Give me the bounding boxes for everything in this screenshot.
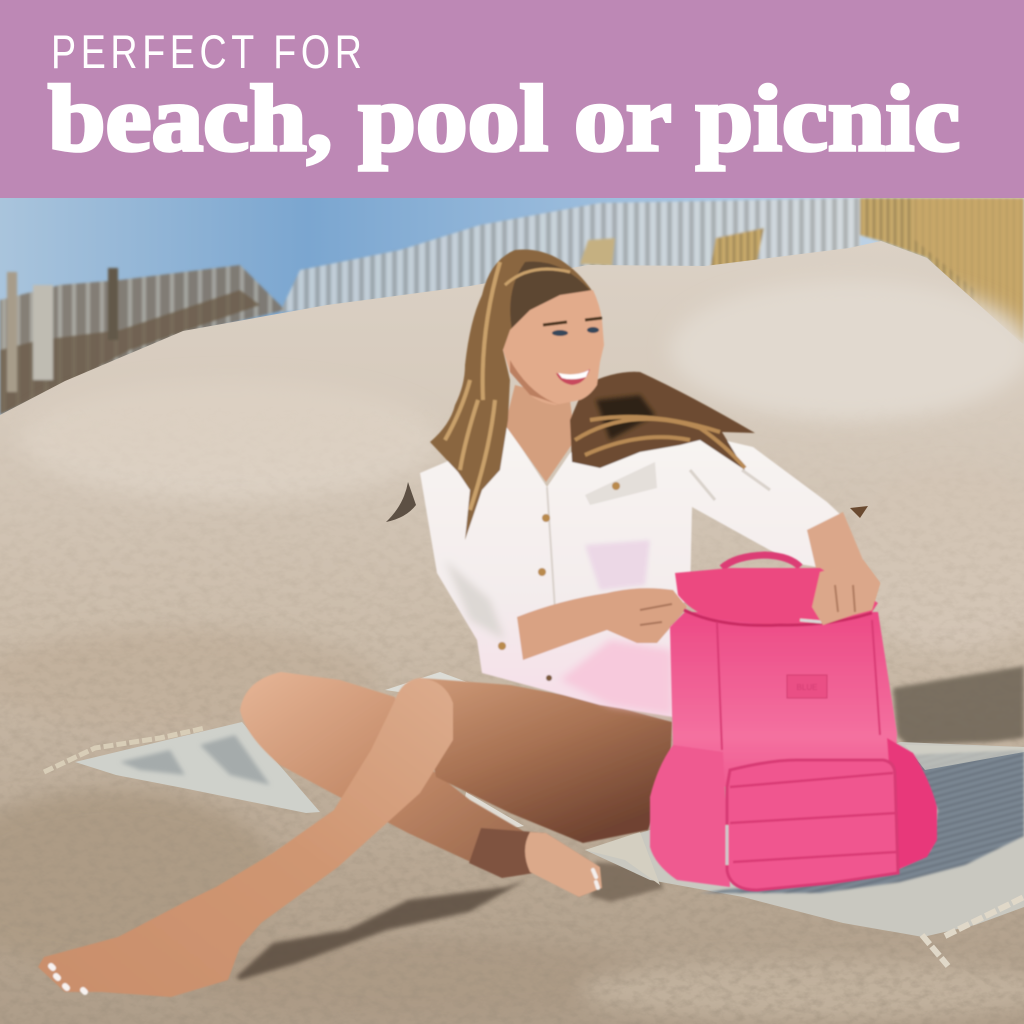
sand shading	[0, 280, 1024, 1020]
handle	[722, 555, 800, 568]
face	[503, 290, 604, 405]
beach blanket	[44, 672, 1024, 966]
sand grain texture	[0, 573, 1024, 1024]
shirt	[420, 420, 843, 717]
shirt details	[445, 462, 770, 715]
hair	[430, 250, 593, 540]
lid	[675, 568, 878, 624]
seaweed on sand	[386, 482, 416, 522]
pink backpack	[650, 555, 937, 890]
far leg	[240, 672, 530, 870]
left corner of blanket	[75, 722, 320, 813]
smile	[556, 369, 590, 385]
near shin and foot	[38, 678, 453, 997]
near forearm and hand	[517, 588, 687, 660]
sand	[0, 241, 1024, 1024]
logo patch: BLUE	[797, 683, 817, 692]
headline text: beach, pool or picnic	[48, 67, 960, 171]
back fence and dune grass	[0, 198, 1024, 415]
sky	[0, 198, 1024, 418]
blanket between the legs	[462, 792, 524, 832]
left side pocket	[650, 745, 730, 887]
shadows on sand	[236, 666, 1024, 980]
near thigh	[420, 678, 672, 843]
front puffer pocket	[727, 760, 898, 890]
neck and chest	[505, 385, 575, 482]
back of hair, wind blown	[570, 372, 755, 470]
toenails	[51, 966, 85, 992]
eyebrow text: PERFECT FOR	[51, 26, 367, 79]
main body	[670, 612, 897, 790]
eyes and eyebrows	[543, 318, 602, 325]
logo patch	[787, 675, 827, 698]
zipper pulls	[726, 825, 728, 865]
fringe	[922, 897, 1024, 966]
right side lit blanket	[585, 742, 1024, 937]
shaded blue weave area	[700, 750, 1024, 893]
woman	[38, 250, 880, 997]
far foot	[469, 828, 602, 897]
right side pocket	[887, 738, 937, 870]
far arm	[807, 512, 880, 625]
fingers over the lid	[812, 560, 880, 625]
title banner	[0, 0, 1024, 198]
